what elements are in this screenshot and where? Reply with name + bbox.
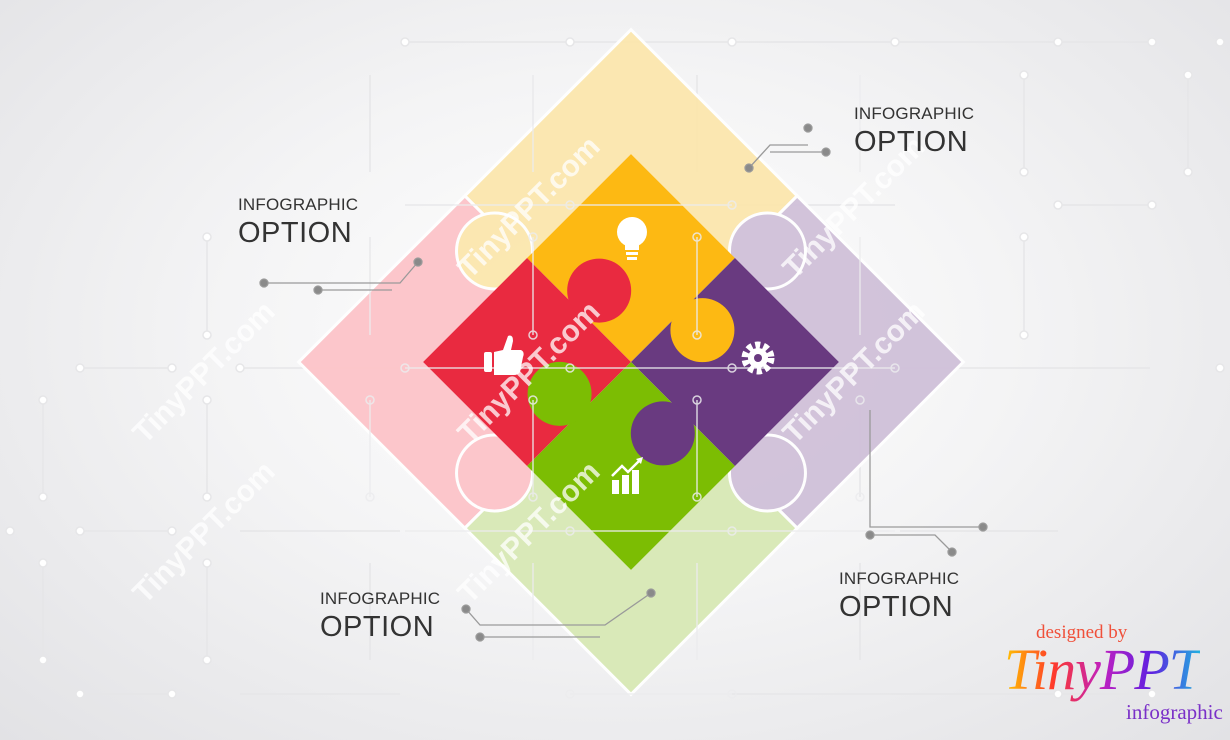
text: option bottom-right: OPTION (839, 591, 953, 623)
logo: designed by (1036, 622, 1127, 643)
text: option top-left: OPTION (238, 217, 352, 249)
watermarks: TinyPPT.com (452, 295, 607, 450)
outer pale puzzle (299, 30, 963, 694)
watermarks (127, 130, 932, 610)
icon: gear (745, 345, 771, 371)
puzzle diagram (299, 30, 963, 694)
watermarks: TinyPPT.com (452, 130, 607, 285)
watermarks: TinyPPT.com (777, 130, 932, 285)
logo: infographic (1126, 700, 1223, 724)
logo: TinyPPT (1004, 637, 1200, 702)
connectors (260, 124, 987, 641)
watermarks: TinyPPT.com (127, 455, 282, 610)
text: option top-left: INFOGRAPHIC (238, 195, 358, 214)
text: option top-right: INFOGRAPHIC (854, 104, 974, 123)
inner puzzle (423, 154, 839, 570)
watermarks: TinyPPT.com (777, 295, 932, 450)
icon: thumbs up (484, 336, 524, 375)
text: option bottom-right: INFOGRAPHIC (839, 569, 959, 588)
text: option top-left (238, 195, 358, 249)
icon: bulb (617, 217, 647, 260)
text: option bottom-left (320, 589, 440, 643)
icon: growth chart (612, 457, 643, 494)
text: option top-right: OPTION (854, 126, 968, 158)
text: option bottom-left: OPTION (320, 611, 434, 643)
logo (1004, 622, 1223, 724)
text: option bottom-right (839, 569, 959, 623)
text: option bottom-left: INFOGRAPHIC (320, 589, 440, 608)
watermarks: TinyPPT.com (127, 295, 282, 450)
text: option top-right (854, 104, 974, 158)
watermarks: TinyPPT.com (452, 455, 607, 610)
